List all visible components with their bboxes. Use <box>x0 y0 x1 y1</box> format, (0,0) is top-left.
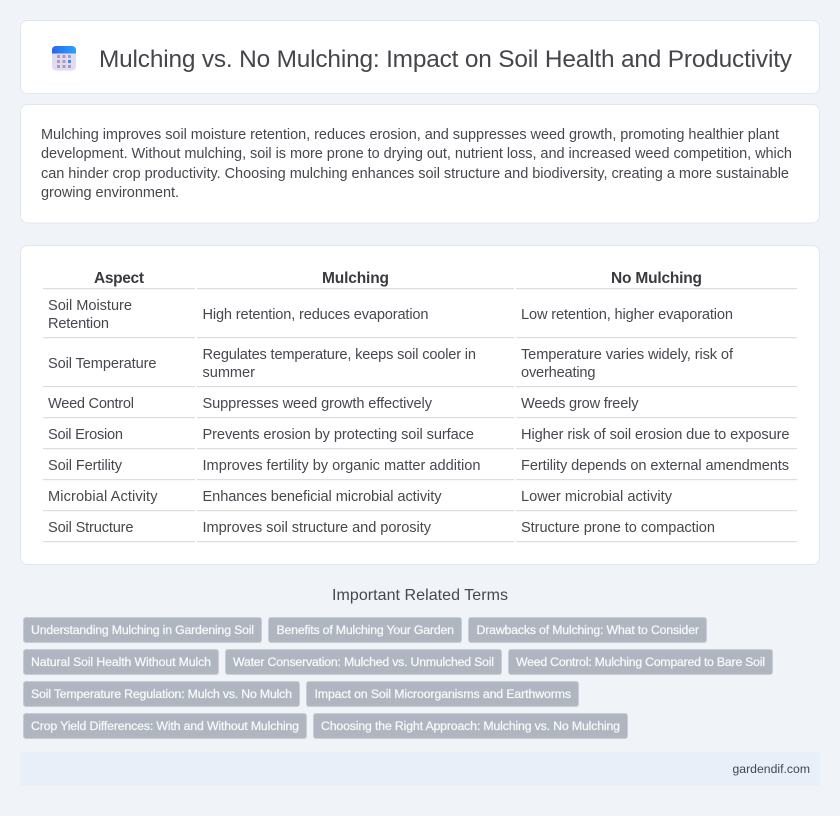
row: soil erosion: Prevents erosion by protecting soil surface <box>202 427 474 443</box>
tag <box>24 714 306 738</box>
row: soil temperature <box>43 347 797 387</box>
row: soil temperature: Temperature varies widely, risk of <box>521 347 734 363</box>
tag <box>24 650 218 674</box>
row: soil structure: Structure prone to compaction <box>521 520 715 536</box>
row: soil moisture retention: Soil Moisture <box>48 298 132 314</box>
panel: header <box>20 20 820 94</box>
row: microbial activity <box>43 489 797 511</box>
row: weed control <box>43 396 797 418</box>
tag: Crop Yield Differences: With and Without Mulching <box>31 719 299 733</box>
tag <box>268 618 462 642</box>
row: soil erosion: Higher risk of soil erosion due to exposure <box>521 427 790 443</box>
row: soil temperature: Regulates temperature, keeps soil cooler in <box>202 347 476 363</box>
tag: Soil Temperature Regulation: Mulch vs. No Mulch <box>31 687 292 701</box>
row: weed control: Weeds grow freely <box>521 396 639 412</box>
summary text: development. Without mulching, soil is more prone to drying out, nutrient loss, and increased weed competition, which <box>41 146 792 162</box>
heading: important related terms: Important Related Terms <box>332 587 508 604</box>
row: weed control: Weed Control <box>48 396 134 412</box>
row: soil fertility: Improves fertility by organic matter addition <box>202 458 480 474</box>
row: soil temperature: overheating <box>521 365 596 381</box>
icon: calendar <box>52 46 76 70</box>
row: soil moisture retention <box>43 298 797 338</box>
tag <box>24 618 262 642</box>
tag: Water Conservation: Mulched vs. Unmulched Soil <box>233 655 494 669</box>
tag: Drawbacks of Mulching: What to Consider <box>476 623 699 637</box>
tag: Benefits of Mulching Your Garden <box>276 623 454 637</box>
row: microbial activity: Microbial Activity <box>48 489 158 505</box>
summary text: Mulching improves soil moisture retention, reduces erosion, and suppresses weed growth, promoting healthier plant <box>41 127 779 143</box>
related term tags <box>24 618 772 738</box>
row: microbial activity: Enhances beneficial microbial activity <box>202 489 442 505</box>
footer: gardendif.com <box>732 762 810 776</box>
table header <box>43 270 797 289</box>
table header: No Mulching <box>611 270 702 287</box>
row: soil fertility <box>43 458 797 480</box>
summary text: growing environment. <box>41 185 179 201</box>
tag: Impact on Soil Microorganisms and Earthworms <box>314 687 571 701</box>
summary text <box>41 127 792 201</box>
row: soil temperature: Soil Temperature <box>48 356 156 372</box>
row: soil erosion <box>43 427 797 449</box>
row: soil temperature: summer <box>202 365 255 381</box>
tag <box>468 618 706 642</box>
row: soil fertility: Soil Fertility <box>48 458 123 474</box>
tag <box>306 682 578 706</box>
row: soil fertility: Fertility depends on external amendments <box>521 458 789 474</box>
title: Mulching vs. No Mulching: Impact on Soil Health and Productivity <box>99 46 793 73</box>
tag: Natural Soil Health Without Mulch <box>31 655 211 669</box>
tag: Choosing the Right Approach: Mulching vs. No Mulching <box>321 719 620 733</box>
row: soil structure <box>43 520 797 542</box>
tag: Understanding Mulching in Gardening Soil <box>31 623 254 637</box>
row: soil moisture retention: Low retention, higher evaporation <box>521 307 733 323</box>
row: soil structure: Improves soil structure and porosity <box>202 520 432 536</box>
row: microbial activity: Lower microbial activity <box>521 489 673 505</box>
tag <box>226 650 502 674</box>
tag <box>24 682 300 706</box>
summary text: can hinder crop productivity. Choosing mulching enhances soil structure and biodiversity, creating a more sustainable <box>41 166 789 182</box>
table header: Mulching <box>322 270 389 287</box>
tag: Weed Control: Mulching Compared to Bare Soil <box>516 655 765 669</box>
tag <box>314 714 628 738</box>
row: soil structure: Soil Structure <box>48 520 134 536</box>
row: soil erosion: Soil Erosion <box>48 427 123 443</box>
panel: comparison table <box>20 246 820 564</box>
panel: summary <box>20 104 820 223</box>
row: soil moisture retention: Retention <box>48 316 109 332</box>
row: soil moisture retention: High retention, reduces evaporation <box>202 307 428 323</box>
footer <box>20 752 820 786</box>
tag <box>508 650 772 674</box>
table header: Aspect <box>94 270 144 287</box>
row: weed control: Suppresses weed growth effectively <box>202 396 433 412</box>
